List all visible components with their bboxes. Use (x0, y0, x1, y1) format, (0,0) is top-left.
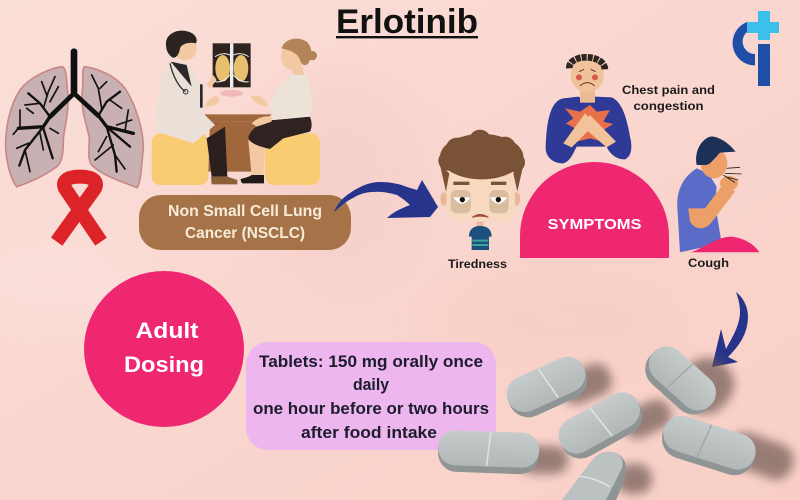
panel: tablet dosing text: after food intake (301, 424, 437, 442)
doctor (157, 31, 237, 184)
label: non small cell lung cancer (139, 195, 351, 250)
panel: tablet dosing text (246, 342, 496, 450)
pill 2 (637, 339, 723, 423)
icon: awareness ribbon (57, 177, 101, 242)
label: cough: Cough (688, 256, 729, 270)
x-ray (213, 43, 251, 97)
callout: adult dosing circle: Adult (136, 318, 199, 343)
illustration: tablets (437, 339, 760, 500)
callout: adult dosing circle: Dosing (124, 352, 204, 377)
label: non small cell lung cancer: Cancer (NSCLC) (185, 225, 305, 242)
panel: tablet dosing text: Tablets: 150 mg orally once (259, 353, 483, 371)
label: chest pain and congestion: Chest pain and (622, 85, 715, 97)
pill 5 (657, 411, 760, 480)
label: tiredness: Tiredness (448, 259, 507, 271)
label: non small cell lung cancer: Non Small Cell Lung (168, 203, 322, 220)
callout: adult dosing circle (84, 271, 244, 427)
icon: person with chest pain (546, 57, 631, 163)
table (202, 114, 272, 172)
panel: tablet dosing text: one hour before or two hours (253, 400, 489, 418)
arrow: cancer to symptoms (334, 180, 438, 218)
pill 1 (501, 351, 594, 424)
icon: brand logo (733, 11, 779, 86)
stools (152, 133, 320, 185)
arrow: pointing to tablets (712, 292, 748, 367)
panel: symptoms dome (520, 162, 669, 258)
panel: tablet dosing text: daily (353, 376, 390, 394)
title: Erlotinib (336, 3, 478, 41)
label: chest pain and congestion (622, 85, 715, 113)
label: chest pain and congestion: congestion (634, 101, 704, 113)
panel: symptoms dome: SYMPTOMS (548, 216, 642, 233)
icon: coughing person (677, 136, 759, 252)
pill 4 (437, 430, 540, 475)
pill 6 (562, 452, 626, 500)
icon: tired boy (438, 130, 525, 250)
pill 3 (552, 386, 650, 466)
icon: lungs (6, 52, 143, 188)
patient (241, 39, 317, 183)
panel: doctor and patient illustration (152, 31, 320, 185)
illustration: pill shadows (520, 348, 798, 494)
